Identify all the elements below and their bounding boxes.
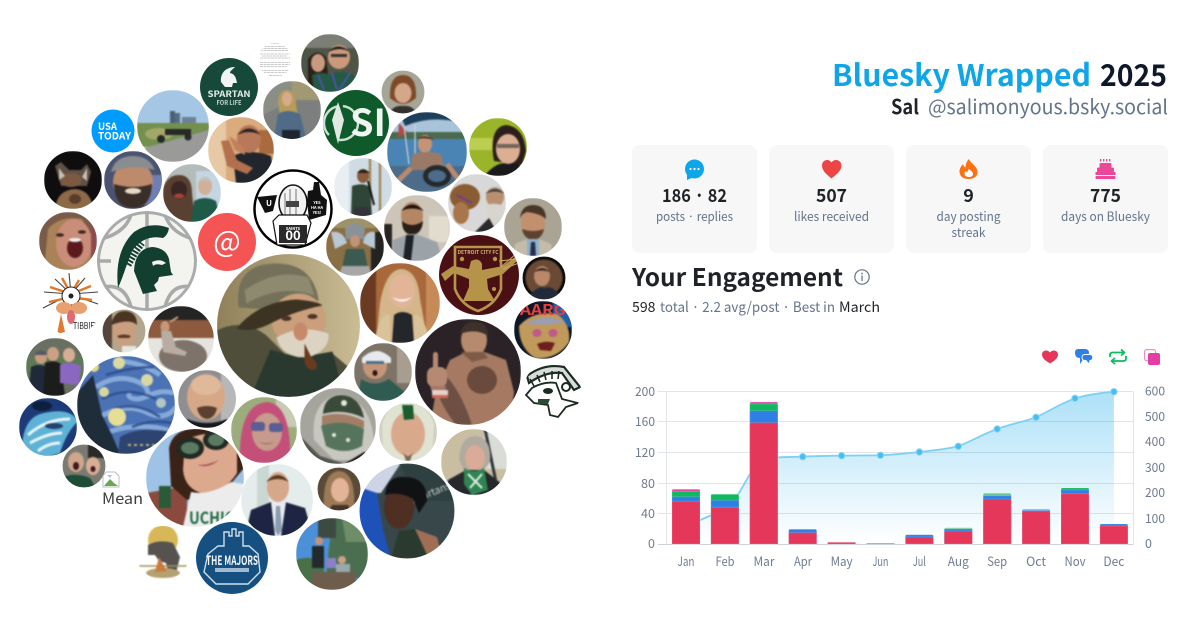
icon: legend heart xyxy=(1042,350,1058,364)
right y axis labels: 500 xyxy=(1145,406,1165,425)
bar: Oct xyxy=(1022,509,1050,544)
right y axis labels: 300 xyxy=(1145,457,1165,476)
title: Bluesky Wrapped 2025: 2025 xyxy=(1100,51,1167,95)
bar: Jun xyxy=(866,542,894,545)
avatar: SI green logo: SI xyxy=(350,93,386,147)
stat card: days on Bluesky: 775 xyxy=(1090,182,1121,208)
panel: stat cards xyxy=(632,145,1168,253)
avatar cluster xyxy=(19,34,581,594)
month labels: Jun xyxy=(872,551,888,570)
stat card: day posting streak: day posting xyxy=(936,206,1000,225)
stat card: posts and replies xyxy=(632,145,757,253)
left y axis labels: 120 xyxy=(635,442,655,461)
avatar: woman with glasses on lime background xyxy=(469,118,527,176)
avatar: gorilla mask and man in green xyxy=(163,164,221,222)
title: Bluesky Wrapped 2025: Bluesky Wrapped xyxy=(832,51,1091,95)
bar: Dec xyxy=(1100,524,1128,544)
stat card: likes received: likes received xyxy=(794,206,869,225)
avatar: group at Spartan statue xyxy=(296,518,368,590)
user name and handle: Sal xyxy=(891,91,919,120)
month labels: Apr xyxy=(794,551,812,570)
avatar: Detroit City FC crest: DETROIT CITY FC xyxy=(458,249,499,256)
grid lines xyxy=(658,392,1134,544)
month labels: Feb xyxy=(716,551,735,570)
heading: Your Engagement: Your Engagement xyxy=(631,258,843,293)
avatar: Saints 00 cartoon badge: HA HA xyxy=(311,205,323,211)
month labels: Jul xyxy=(913,551,926,570)
avatar: Saints 00 cartoon badge xyxy=(253,169,333,249)
header xyxy=(832,51,1168,120)
avatar: man in dark portrait xyxy=(522,256,566,300)
avatar: Spartan for Life logo xyxy=(200,58,258,116)
left y axis labels: 0 xyxy=(648,533,655,552)
icon: legend replies xyxy=(1075,349,1093,364)
bar: Jul xyxy=(905,535,933,544)
chart legend icons xyxy=(1042,349,1160,365)
icon: legend quotes xyxy=(1145,350,1160,365)
avatar: cartoon spiky creature xyxy=(42,273,98,334)
avatar: man with mustache xyxy=(102,309,146,353)
avatar: woman in sunglasses and Michigan shirt: UCHIG xyxy=(189,504,235,529)
avatar: The Majors logo xyxy=(196,522,268,594)
avatar: bald man xyxy=(178,370,237,428)
cumulative line points xyxy=(800,388,1117,460)
avatar: red at-sign logo xyxy=(198,213,256,271)
avatar: USA Today logo: USA xyxy=(98,118,118,133)
bar: Aug xyxy=(944,528,972,544)
right y axis labels: 600 xyxy=(1145,380,1165,400)
engagement summary line: total · 2.2 avg/post · Best in xyxy=(660,297,835,317)
engagement summary line: March xyxy=(839,297,880,317)
icon: heart xyxy=(822,160,842,178)
avatar: USA Today logo: TODAY xyxy=(98,128,131,142)
avatar: Spartan for Life logo: FOR LIFE xyxy=(216,97,242,107)
avatar: AARGH comic monster: AARG xyxy=(519,299,566,320)
month labels xyxy=(678,551,1125,570)
avatar: Spartan for Life logo: SPARTAN xyxy=(207,88,251,100)
avatar: skyline and cargo bike xyxy=(137,90,209,162)
stat card: day posting streak: streak xyxy=(952,222,986,241)
avatar: woman in denim jacket xyxy=(263,81,322,140)
stat card: day posting streak: 9 xyxy=(963,182,974,208)
avatar: red at-sign logo: @ xyxy=(213,219,241,261)
avatar: selfie couple with lanyards xyxy=(301,34,359,92)
avatar: man with groomed beard xyxy=(504,198,562,256)
left y axis labels: 200 xyxy=(635,381,655,400)
stat card: days on Bluesky xyxy=(1043,145,1168,253)
avatar: person in Spartan beanie and neck gaiter xyxy=(300,388,376,464)
right y axis labels: 400 xyxy=(1145,431,1165,450)
avatar: man on a boat xyxy=(387,112,467,192)
icon: chat bubble xyxy=(685,160,704,180)
stat card: days on Bluesky: days on Bluesky xyxy=(1061,206,1150,225)
bar: Mar xyxy=(750,402,778,544)
avatar: handwritten text page xyxy=(260,43,290,76)
avatar: coach clapping xyxy=(208,117,275,183)
month labels: Mar xyxy=(754,551,775,570)
avatar: Spartan helmet sketch xyxy=(523,362,581,420)
avatar: Saints 00 cartoon badge: YES! xyxy=(312,210,322,216)
avatar: AARGH comic monster xyxy=(514,299,573,359)
left y axis labels: 40 xyxy=(641,503,655,522)
stat card: posts and replies: 186 · 82 xyxy=(662,182,727,208)
month labels: Aug xyxy=(948,551,969,570)
avatar: man in grey suit with beard xyxy=(384,195,450,261)
month labels: Oct xyxy=(1026,551,1046,570)
left y axis labels: 80 xyxy=(641,473,655,492)
avatar: Detroit City FC crest xyxy=(439,235,519,315)
avatar: red panda xyxy=(44,151,102,209)
bar: Nov xyxy=(1061,488,1089,544)
avatar: basketball player in green jersey: Spartans xyxy=(408,477,453,507)
stat card: posts and replies: posts · replies xyxy=(656,206,733,225)
month labels: Sep xyxy=(987,551,1007,570)
avatar: blue dragon artwork xyxy=(19,398,78,457)
avatar: Starry Night painting xyxy=(77,356,176,454)
month labels: Jan xyxy=(678,551,694,570)
avatar: cartoon spiky creature: TIBBIFY xyxy=(73,319,98,332)
avatar: woman with pink hair and mirrored sunglasses xyxy=(231,397,297,463)
right y axis labels xyxy=(1145,380,1165,552)
cumulative area xyxy=(686,392,1114,544)
avatar: woman with green scarf in car xyxy=(441,429,507,495)
avatar: bison illustration xyxy=(136,525,190,580)
avatar: llama and white-bearded man xyxy=(448,174,506,232)
icon: birthday cake xyxy=(1096,159,1116,179)
avatar: blonde woman smiling xyxy=(360,263,440,343)
alt text: Mean: Mean xyxy=(102,487,143,509)
avatar: mascot statue xyxy=(326,218,384,276)
engagement summary line: 598 xyxy=(632,297,656,317)
avatar: Saints 00 cartoon badge: SAINTS xyxy=(286,226,301,232)
bar: Jan xyxy=(672,489,700,544)
avatar: excited couple xyxy=(62,444,106,488)
avatar: man in white Spartan winter hat xyxy=(379,403,437,461)
avatar: bearded man in cap xyxy=(104,151,163,209)
stacked bars xyxy=(672,402,1128,544)
right y axis labels: 0 xyxy=(1145,533,1152,552)
bar: Feb xyxy=(711,494,739,544)
avatar: bearded man with clarinet xyxy=(334,158,392,217)
bar: Sep xyxy=(983,493,1011,544)
user name and handle: @salimonyous.bsky.social xyxy=(928,91,1168,120)
month labels: Dec xyxy=(1103,551,1125,570)
stat card: likes received xyxy=(769,145,894,253)
stat card: likes received: 507 xyxy=(816,182,847,208)
month labels: May xyxy=(831,551,853,570)
avatar: Saints 00 cartoon badge: YES xyxy=(312,200,321,206)
bar: May xyxy=(828,542,856,544)
avatar: Michigan State basketball logo xyxy=(97,211,197,311)
month labels: Nov xyxy=(1064,551,1086,570)
avatar: Saints 00 cartoon badge: U xyxy=(266,198,272,209)
avatar: shirtless man with raised finger xyxy=(415,319,521,425)
right y axis labels: 100 xyxy=(1145,508,1165,527)
avatar: USA Today logo xyxy=(91,109,135,153)
avatar: old man with pipe xyxy=(216,254,360,398)
avatar: woman in sunglasses and Michigan shirt xyxy=(146,428,244,529)
icon: flame xyxy=(960,159,978,179)
left y axis labels: 160 xyxy=(635,411,655,430)
stat card: day posting streak xyxy=(906,145,1031,253)
avatar: Saints 00 cartoon badge: 00 xyxy=(285,225,301,244)
avatar: SI green logo xyxy=(323,90,389,156)
bar: Apr xyxy=(789,529,817,544)
icon: broken image xyxy=(103,472,119,487)
avatar: man in navy suit xyxy=(241,464,313,536)
icon: legend reposts xyxy=(1110,350,1126,364)
icon: info xyxy=(855,270,869,284)
cumulative line xyxy=(686,392,1114,526)
avatar: woman with short auburn hair xyxy=(381,70,425,114)
chart: engagement by month xyxy=(635,380,1165,570)
avatar: The Majors logo: THE MAJORS xyxy=(206,550,258,569)
broken image placeholder with alt text xyxy=(102,472,143,509)
left y axis labels xyxy=(635,381,655,552)
avatar: family group in winter coats xyxy=(26,338,84,396)
avatar: blonde woman small portrait xyxy=(317,467,361,511)
avatar: woman sitting on rock xyxy=(148,306,214,372)
avatar: screaming woman xyxy=(39,212,97,270)
avatar: man in backwards cap and hoodie xyxy=(354,343,412,401)
avatar: basketball player in green jersey xyxy=(359,463,455,559)
right y axis labels: 200 xyxy=(1145,482,1165,501)
